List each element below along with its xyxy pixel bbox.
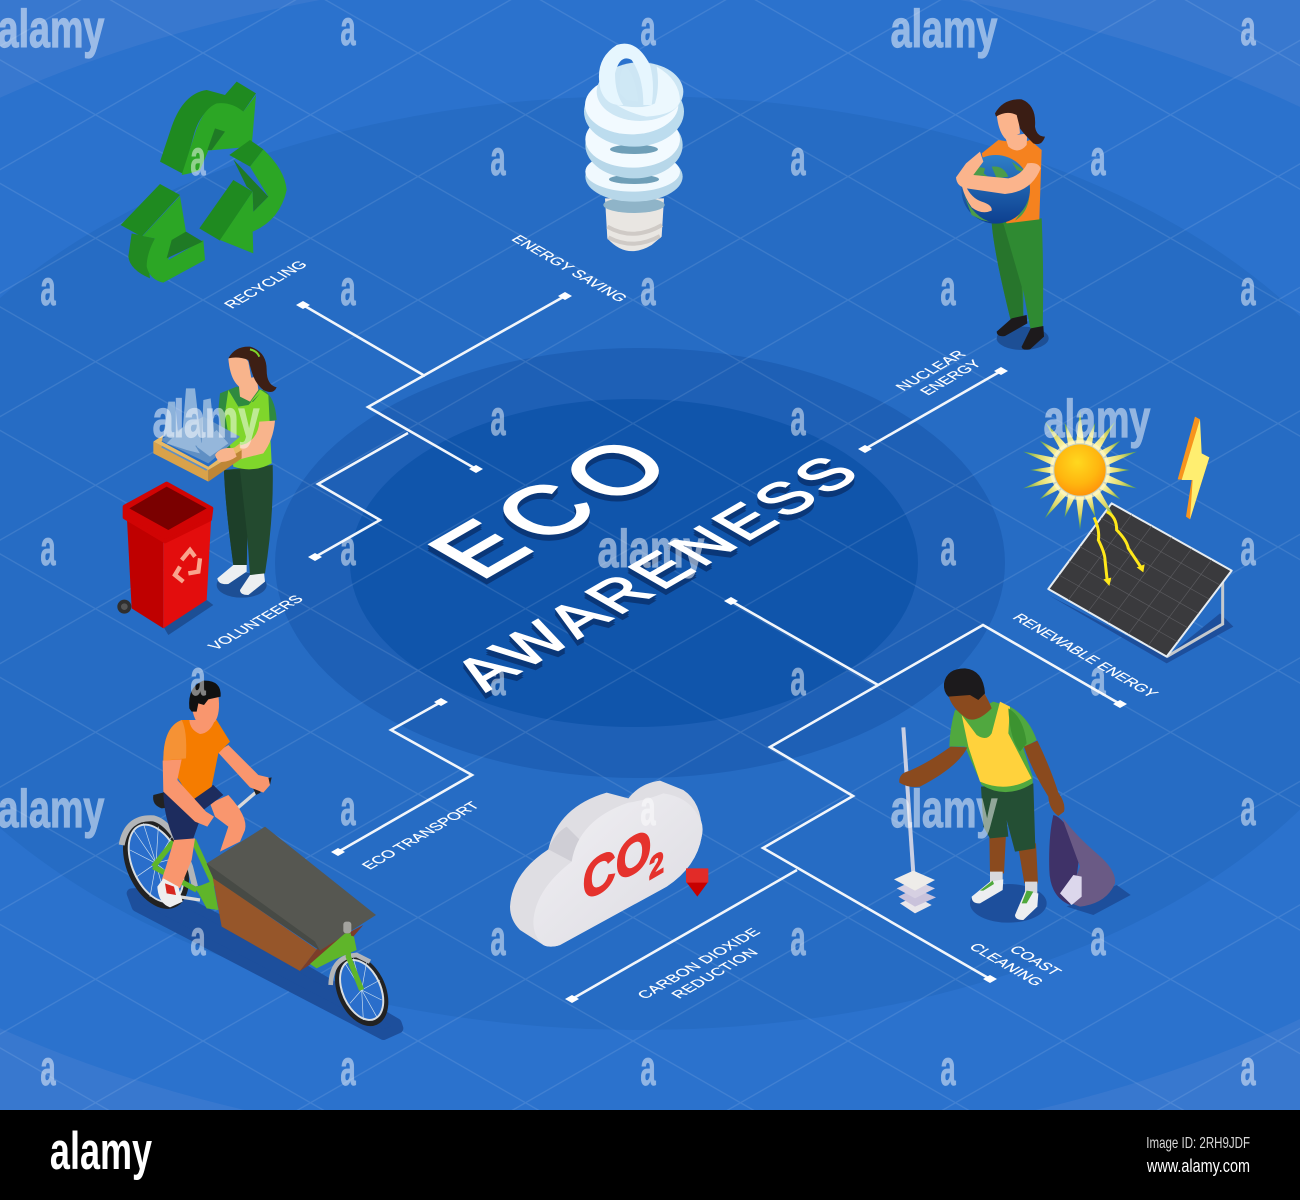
footer bar [0,1110,1300,1200]
watermark: repeated marks: a [1240,259,1256,316]
watermark: alamy logos: alamy [598,519,705,579]
head [944,668,992,720]
watermark: repeated marks: a [790,129,806,186]
watermark: repeated marks: a [340,779,356,836]
front wheel [325,947,399,1035]
watermark: repeated marks: a [940,259,956,316]
watermark: repeated marks: a [790,389,806,446]
footer logo: alamy [50,1121,152,1181]
sun [1022,410,1138,530]
connector end markers [296,292,1127,1003]
watermark: repeated marks: a [340,519,356,576]
watermark: repeated marks: a [490,649,506,706]
rubbish bag [1049,815,1115,907]
watermark: repeated marks: a [40,519,56,576]
rider [157,681,270,907]
watermark: repeated marks: a [940,519,956,576]
watermark: repeated marks: a [1090,909,1106,966]
labels [205,233,1162,1002]
icon: woman holding globe [956,99,1049,350]
labels: NUCLEAR [892,348,970,393]
watermark: repeated marks: a [190,129,206,186]
watermark: repeated marks: a [790,909,806,966]
watermark: repeated marks: a [940,1039,956,1096]
watermark: repeated marks: a [1240,519,1256,576]
labels: ECO TRANSPORT [358,799,484,872]
title: ECO AWARENESS: AWARENESS [438,447,874,699]
watermark: repeated marks: a [340,0,356,56]
icon: energy saving bulb [584,44,684,251]
sun rays hitting the panel [1094,512,1145,586]
crate with bottles [153,388,242,482]
watermark: repeated marks: a [40,259,56,316]
front fork [310,922,362,990]
lightning bolt [1178,417,1209,519]
watermark: repeated marks: a [640,0,656,56]
labels: CARBON DIOXIDE [634,926,764,1002]
watermark: repeated marks: a [190,909,206,966]
connector lines [303,296,1120,999]
mop and paper pile [894,727,936,913]
labels: CLEANING [965,941,1047,989]
watermark: repeated marks: a [1240,1039,1256,1096]
labels: ENERGY SAVING [507,233,631,305]
watermark: repeated marks: a [340,259,356,316]
watermark: repeated marks: a [640,259,656,316]
watermark: repeated marks: a [40,1039,56,1096]
icon: volunteer with crate and bin [117,347,277,635]
arms [899,741,1064,816]
figure: volunteer woman [215,347,277,598]
watermark: repeated marks: a [340,1039,356,1096]
bike frame [153,827,238,910]
legs and shorts [972,783,1038,920]
icon: recycling arrows [121,82,287,283]
watermark: repeated marks: a [1240,779,1256,836]
icon: coast cleaning man [894,668,1131,923]
watermark: alamy logos: alamy [891,0,998,59]
watermark: alamy logos: alamy [891,779,998,839]
watermark: repeated marks: a [790,649,806,706]
labels: REDUCTION [668,946,762,1001]
image id: Image ID: 2RH9JDF [1146,1133,1250,1151]
CO2 text: 2 [649,843,664,887]
icon: sun, solar panel, lightning [1022,410,1233,663]
watermark: repeated marks: a [640,779,656,836]
icon: cargo bike with rider [110,681,399,1035]
labels: RECYCLING [221,258,312,311]
website: www.alamy.com [1146,1155,1250,1176]
labels: COAST [1005,943,1065,978]
solar panel [1048,503,1232,657]
bin [117,484,213,635]
icon: cloud with CO2 [510,781,703,947]
watermark: repeated marks: a [1090,129,1106,186]
watermark: alamy logos: alamy [0,779,105,839]
watermark: repeated marks: a [490,389,506,446]
watermark: repeated marks: a [1240,0,1256,56]
rear wheel [110,809,202,919]
watermark: repeated marks: a [490,129,506,186]
watermark: repeated marks: a [1090,649,1106,706]
watermark: repeated marks: a [190,649,206,706]
labels: ENERGY [916,358,986,398]
watermark: alamy logos: alamy [1044,389,1151,449]
watermark: repeated marks: a [640,1039,656,1096]
torso [949,702,1037,792]
icon: red down marker [686,868,708,897]
CO2 text: CO [583,816,652,915]
watermark: repeated marks: a [490,909,506,966]
watermark: alamy logos [0,0,1151,839]
cloud body [510,781,702,947]
labels: VOLUNTEERS [205,593,308,653]
labels: RENEWABLE ENERGY [1008,611,1162,700]
title: ECO AWARENESS: ECO [406,421,702,592]
watermark: alamy logos: alamy [153,389,260,449]
cargo box [207,827,376,971]
